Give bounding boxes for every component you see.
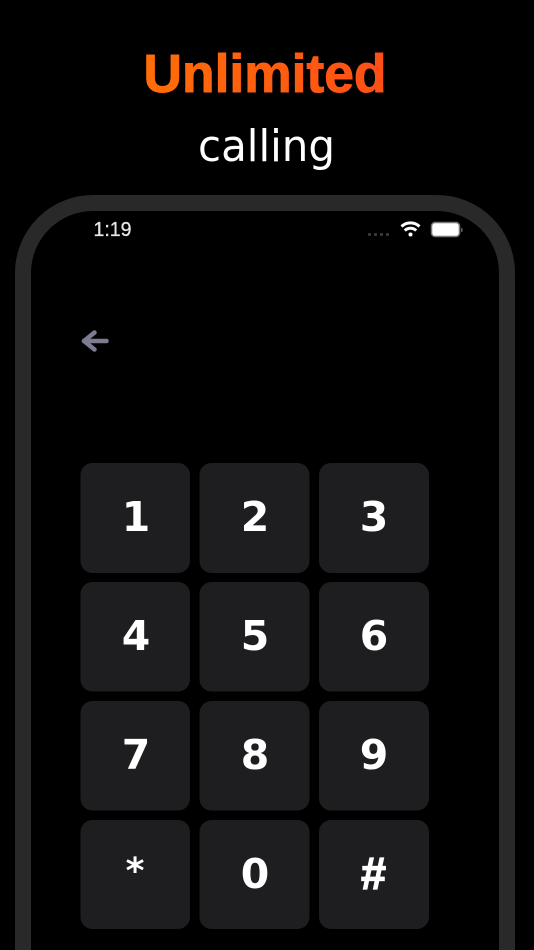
keypad [80, 463, 429, 929]
subtitle: calling: calling [198, 121, 335, 172]
key 0: 0 [241, 850, 269, 898]
key 5: 5 [241, 612, 269, 660]
signal dots [368, 233, 389, 236]
key 8 [200, 701, 310, 810]
key star: * [126, 851, 145, 892]
icon: battery [432, 222, 462, 236]
key 0 [200, 820, 310, 929]
key 3 [319, 463, 429, 573]
key 7: 7 [122, 731, 150, 779]
key hash: # [361, 848, 386, 899]
key 2 [200, 463, 310, 573]
key 8: 8 [241, 731, 269, 779]
icon: wifi [402, 223, 420, 236]
status time: 1:19 [94, 219, 132, 241]
status bar [94, 219, 462, 241]
key 6 [319, 582, 429, 692]
key 9: 9 [360, 731, 388, 779]
key 2: 2 [241, 493, 269, 541]
phone frame [23, 203, 507, 950]
key 4: 4 [122, 612, 150, 660]
key 9 [319, 701, 429, 810]
key 5 [200, 582, 310, 692]
key 1 [80, 463, 190, 573]
key 1: 1 [122, 493, 150, 541]
key star [80, 820, 190, 929]
key 3: 3 [360, 493, 388, 541]
key hash [319, 820, 429, 929]
title: Unlimited: Unlimited [144, 44, 386, 104]
key 7 [80, 701, 190, 810]
key 6: 6 [360, 612, 388, 660]
icon: back arrow [84, 332, 106, 350]
key 4 [80, 582, 190, 692]
